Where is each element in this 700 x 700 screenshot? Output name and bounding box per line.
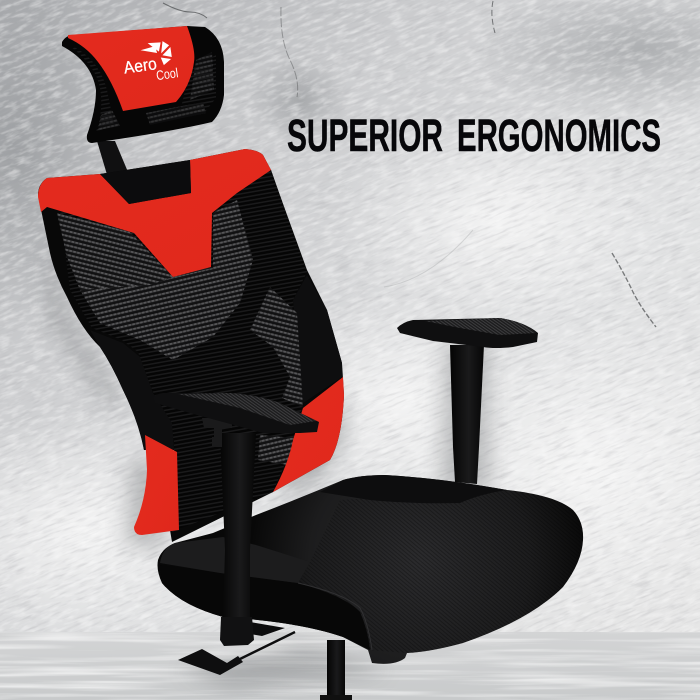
- seat front flap: [160, 537, 310, 583]
- left dark side panel: [90, 330, 174, 450]
- stem: [327, 640, 345, 700]
- left armrest: [153, 393, 319, 646]
- right dark side panel: [293, 275, 342, 403]
- under-seat mechanism: [250, 622, 285, 636]
- back red lower right panel: [273, 377, 344, 492]
- seat rear cushion fold: [320, 475, 507, 503]
- brand logo: Aero: [123, 54, 158, 78]
- black inset: [100, 160, 191, 204]
- back red lower left panel: [134, 435, 179, 535]
- right armrest: [397, 318, 538, 484]
- brand logo: Cool: [155, 65, 179, 83]
- headrest: [62, 26, 224, 143]
- seat front lip: [160, 565, 370, 650]
- headrest support post: [97, 141, 128, 178]
- back red upper panel: [38, 149, 271, 277]
- brand logo: [121, 40, 179, 88]
- chair: [38, 26, 583, 700]
- light mesh regions: [57, 213, 173, 300]
- dark mesh: [60, 170, 307, 532]
- seat: [158, 475, 583, 664]
- title: SUPERIOR: [287, 110, 443, 161]
- adjustment lever: [178, 632, 295, 675]
- chair shadow on wall: [45, 230, 490, 688]
- headrest red panel: [68, 26, 194, 111]
- background: floor: [0, 632, 700, 700]
- backrest: [38, 149, 344, 542]
- base hub: [320, 695, 352, 700]
- background: floor streaks: [0, 632, 700, 700]
- background: cracks: [163, 1, 656, 327]
- backrest shell: [38, 149, 344, 542]
- title: [287, 110, 661, 161]
- icon: fan logo: [140, 40, 173, 68]
